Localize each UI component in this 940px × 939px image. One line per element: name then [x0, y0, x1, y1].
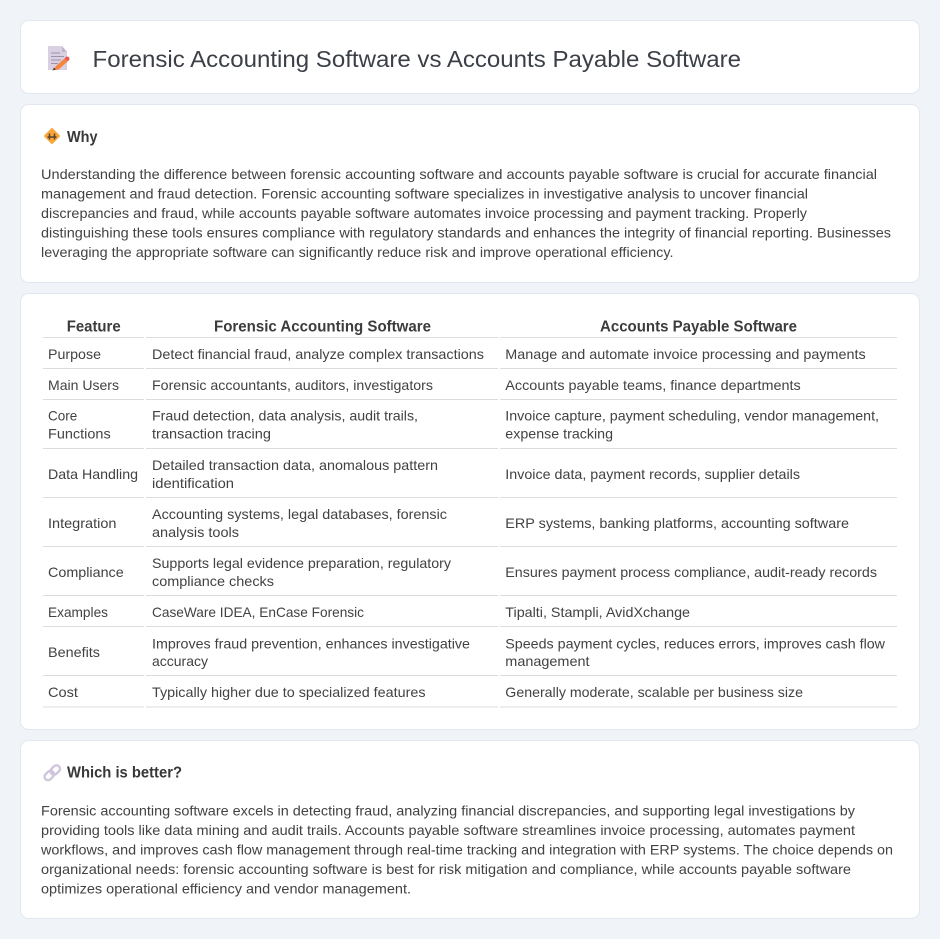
- text block: why paragraph: Understanding the difference between forensic accounting software and accounts payable software is crucial for accurate financial: [41, 166, 877, 182]
- row: main users: Accounts payable teams, finance departments: [505, 377, 801, 393]
- row: integration: [43, 506, 897, 547]
- row: purpose: Purpose: [48, 346, 101, 362]
- table header row: [43, 318, 897, 338]
- text block: why paragraph: discrepancies and fraud, while accounts payable software automates invoice processing and payment tracking. Properly: [41, 205, 807, 221]
- row: purpose: Detect financial fraud, analyze complex transactions: [152, 346, 484, 362]
- panel: title header: [20, 20, 920, 94]
- row: core functions: Invoice capture, payment scheduling, vendor management,: [505, 408, 879, 424]
- row: purpose: [43, 346, 897, 369]
- icon: document with pencil: [48, 46, 70, 70]
- text block: why paragraph: leveraging the appropriate software can significantly reduce risk and improve operational efficiency.: [41, 244, 674, 260]
- row: data handling: Detailed transaction data, anomalous pattern: [152, 457, 438, 473]
- row: cost: Generally moderate, scalable per business size: [505, 684, 803, 700]
- row: benefits: management: [505, 653, 590, 669]
- text block: which is better paragraph: optimizes operational efficiency and vendor management.: [41, 881, 411, 897]
- panel: which is better: [20, 740, 920, 918]
- row: examples: CaseWare IDEA, EnCase Forensic: [152, 604, 364, 620]
- heading: which is better: Which is better?: [67, 764, 182, 782]
- row: core functions: expense tracking: [505, 426, 613, 442]
- row: integration: analysis tools: [152, 524, 239, 540]
- row: compliance: Supports legal evidence preparation, regulatory: [152, 555, 451, 571]
- row: main users: Forensic accountants, auditors, investigators: [152, 377, 433, 393]
- row: core functions: Core: [48, 408, 77, 424]
- row: core functions: transaction tracing: [152, 426, 271, 442]
- row: data handling: identification: [152, 475, 234, 491]
- row: compliance: Compliance: [48, 564, 124, 580]
- icon: link: [43, 764, 61, 782]
- row: integration: ERP systems, banking platforms, accounting software: [505, 515, 849, 531]
- row: examples: [43, 604, 897, 627]
- panel: why: [20, 104, 920, 282]
- row: examples: Tipalti, Stampli, AvidXchange: [505, 604, 690, 620]
- row: benefits: [43, 636, 897, 676]
- row: core functions: [43, 408, 897, 449]
- text block: which is better paragraph: workflows, and improves cash flow management through real-time tracking and integration with ERP systems. The choice depends on: [40, 842, 893, 858]
- row: core functions: Fraud detection, data analysis, audit trails,: [152, 408, 418, 424]
- row: benefits: accuracy: [152, 653, 208, 669]
- row: cost: Cost: [48, 684, 78, 700]
- row: main users: [43, 377, 897, 400]
- row: core functions: Functions: [48, 426, 111, 442]
- text block: which is better paragraph: Forensic accounting software excels in detecting fraud, analyzing financial discrepancies, and supporting legal investigations by: [41, 802, 855, 818]
- row: compliance: [43, 555, 897, 596]
- row: benefits: Improves fraud prevention, enhances investigative: [152, 636, 470, 652]
- row: cost: Typically higher due to specialized features: [152, 684, 426, 700]
- row: cost: [43, 684, 897, 708]
- text block: why paragraph: distinguishing these tools ensures compliance with regulatory standards and enhances the integrity of financial reporting. Businesses: [41, 224, 891, 240]
- row: data handling: [43, 457, 897, 498]
- table header row: Accounts Payable Software: [600, 318, 797, 336]
- row: benefits: Benefits: [48, 644, 100, 660]
- text block: why paragraph: management and fraud detection. Forensic accounting software specializes in investigative analysis to uncover financial: [41, 186, 808, 202]
- title: Forensic Accounting Software vs Accounts Payable Software: [92, 46, 741, 72]
- panel: comparison table: [20, 294, 920, 730]
- text block: why paragraph: [41, 166, 891, 260]
- row: examples: Examples: [48, 604, 108, 620]
- row: purpose: Manage and automate invoice processing and payments: [505, 346, 866, 362]
- icon: orange diamond sign: [44, 128, 60, 144]
- text block: which is better paragraph: [40, 802, 893, 897]
- row: compliance: compliance checks: [152, 573, 274, 589]
- row: compliance: Ensures payment process compliance, audit-ready records: [505, 564, 877, 580]
- row: main users: Main Users: [48, 377, 119, 393]
- table header row: Feature: [67, 318, 121, 336]
- heading: why: Why: [67, 129, 98, 146]
- row: data handling: Data Handling: [48, 466, 138, 482]
- row: integration: Integration: [48, 515, 116, 531]
- text block: which is better paragraph: providing tools like data mining and audit trails. Accounts payable software streamlines invoice processing, automates payment: [41, 822, 855, 838]
- text block: which is better paragraph: organizational needs: forensic accounting software is best for risk mitigation and compliance, while accounts payable software: [41, 861, 851, 877]
- row: benefits: Speeds payment cycles, reduces errors, improves cash flow: [505, 636, 886, 652]
- table header row: Forensic Accounting Software: [214, 318, 431, 336]
- row: data handling: Invoice data, payment records, supplier details: [505, 466, 800, 482]
- row: integration: Accounting systems, legal databases, forensic: [152, 506, 447, 522]
